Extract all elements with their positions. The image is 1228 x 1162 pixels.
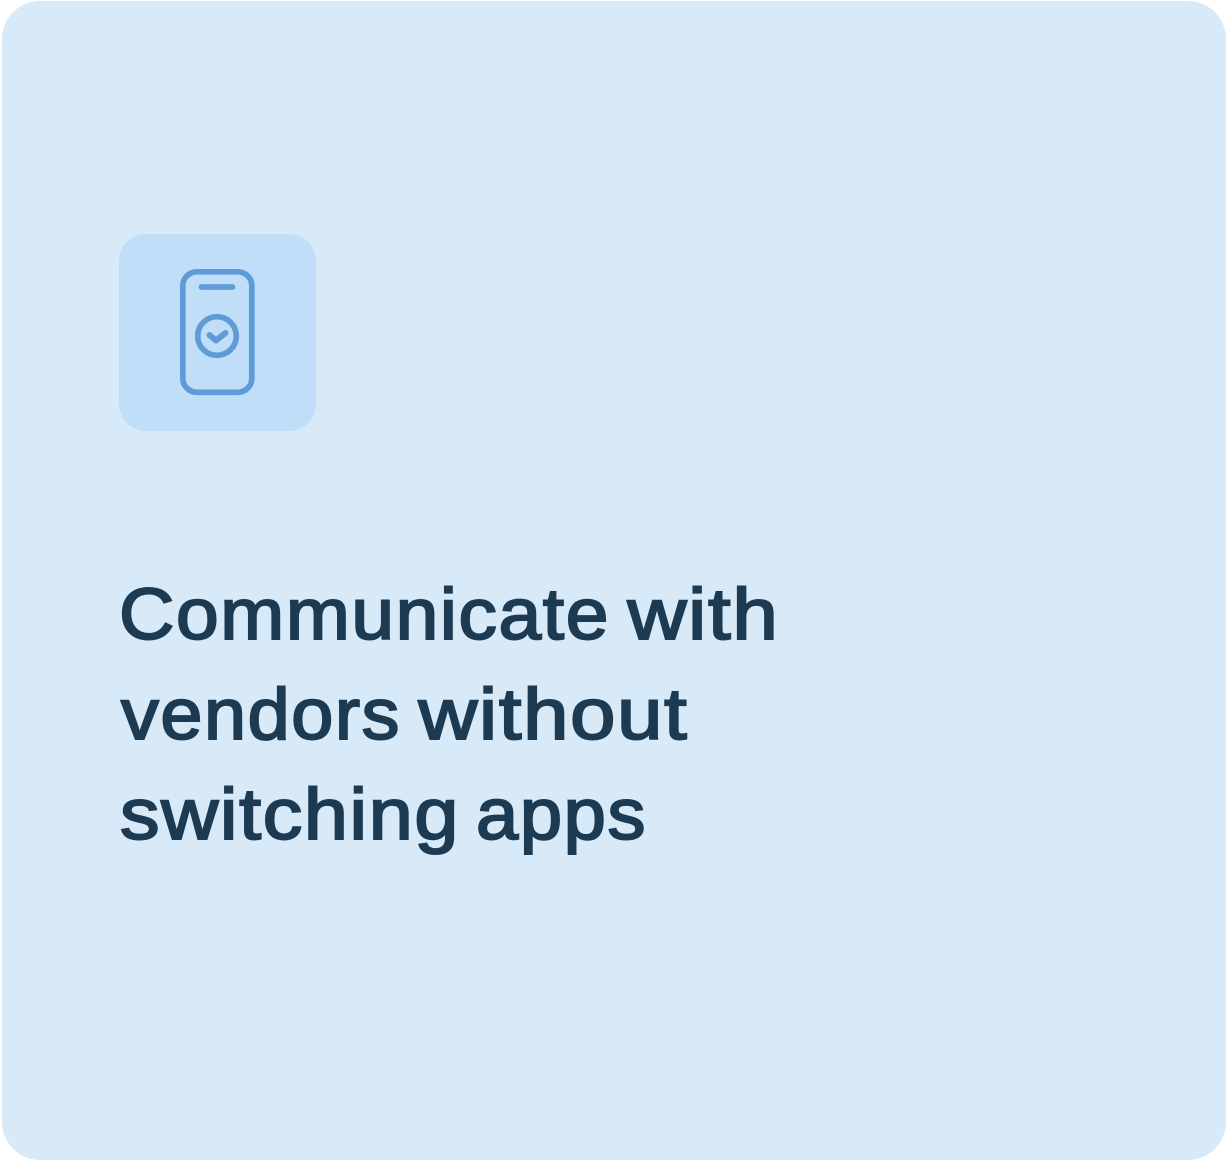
heading: apps [476,775,647,855]
heading [119,575,780,855]
heading: switching [120,775,460,855]
heading: without [417,675,688,755]
heading: Communicate [119,575,610,655]
icon: phone with check mark [119,234,316,431]
heading: vendors [121,675,401,755]
heading: with [626,575,780,655]
